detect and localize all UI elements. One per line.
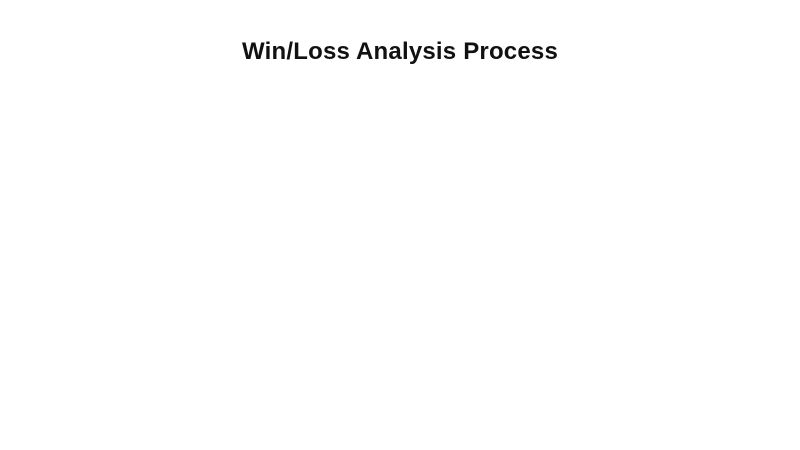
- title: Win/Loss Analysis Process: [242, 38, 558, 65]
